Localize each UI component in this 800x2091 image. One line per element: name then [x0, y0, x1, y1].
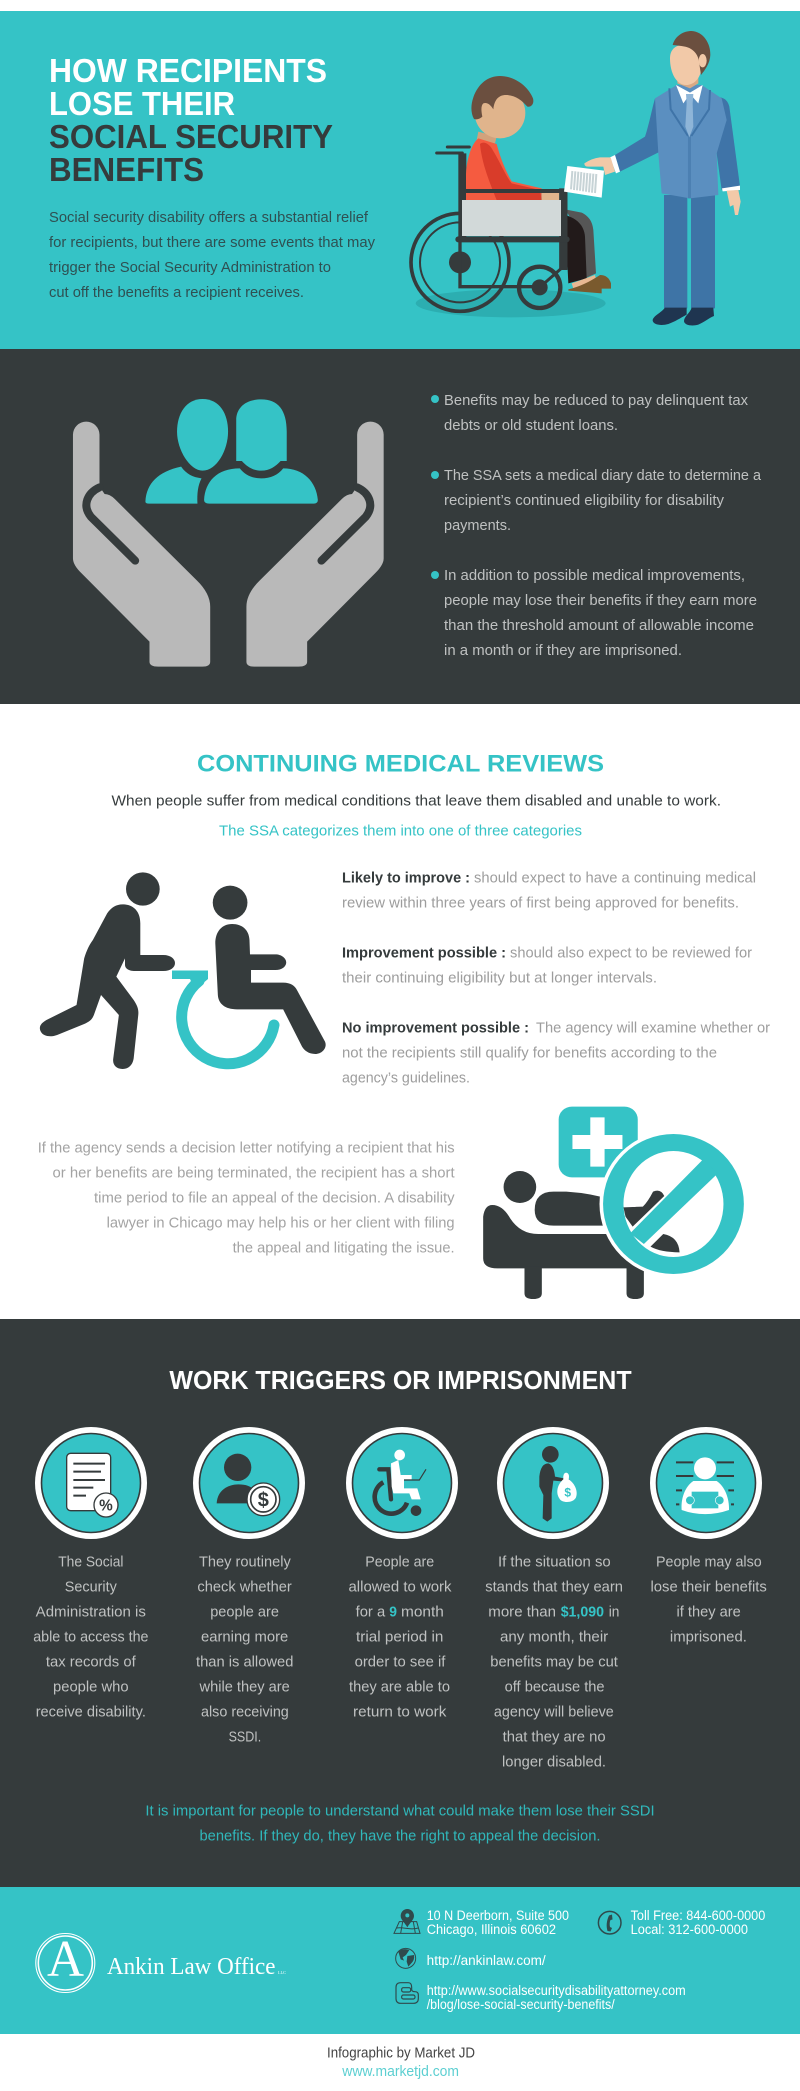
- column text: income limit: [485, 1554, 623, 1771]
- icon: person with money bag: $: [564, 1486, 571, 1500]
- column text: income limit: that they are no: [503, 1729, 606, 1746]
- bullet text: debts or old student loans.: [444, 417, 618, 434]
- bullet text: than the threshold amount of allowable income: [444, 617, 754, 634]
- column text: trial period: order to see if: [355, 1654, 446, 1671]
- category line: The SSA categorizes them into one of three categories: [219, 822, 582, 840]
- column text: imprisonment: [650, 1554, 767, 1646]
- column text: tax records: [33, 1554, 149, 1721]
- category descriptions: should also expect to be reviewed for: [510, 944, 752, 962]
- icon: globe: [396, 1948, 416, 1968]
- closing statement: It is important for people to understand what could make them lose their SSDI: [145, 1803, 655, 1820]
- appeal paragraph: or her benefits are being terminated, the recipient has a short: [52, 1164, 455, 1181]
- column text: tax records: receive disability.: [36, 1704, 146, 1721]
- standing man head: [677, 77, 698, 88]
- credit line: www.marketjd.com: [341, 2063, 459, 2080]
- appeal paragraph: If the agency sends a decision letter notifying a recipient that his: [38, 1139, 455, 1156]
- column text: tax records: tax records of: [46, 1654, 137, 1671]
- icon: document with percent: [38, 1430, 144, 1536]
- heading: CONTINUING MEDICAL REVIEWS: [197, 750, 604, 778]
- column text: routine checks: earning more: [201, 1629, 288, 1646]
- subheading: When people suffer from medical conditions that leave them disabled and unable to work.: [112, 792, 721, 810]
- website link: http://ankinlaw.com/: [427, 1953, 546, 1968]
- panel: header: [0, 11, 800, 349]
- column text: routine checks: people are: [210, 1604, 279, 1621]
- column text: tax records: people who: [53, 1679, 129, 1696]
- logo: Ankin Law Office: [36, 1931, 286, 1992]
- icon: person pushing wheelchair: [40, 872, 326, 1069]
- column text: imprisonment: imprisoned.: [670, 1629, 747, 1646]
- column text: trial period: they are able to: [349, 1679, 450, 1696]
- column text: income limit: benefits may be cut: [490, 1654, 619, 1671]
- category descriptions: [342, 870, 770, 1086]
- category descriptions: not the recipients still qualify for benefits according to the: [342, 1044, 717, 1062]
- column text: income limit: longer disabled.: [502, 1754, 606, 1771]
- icon: patient in bed with prohibition sign: [483, 1107, 747, 1299]
- icon: map pin: [394, 1909, 420, 1933]
- logo: Ankin Law Office: Ankin Law Office: [107, 1954, 276, 1980]
- column text: tax records: Administration is: [36, 1604, 146, 1621]
- column text: income limit: $1,090: [561, 1604, 604, 1621]
- paper: [564, 166, 604, 198]
- panel: work triggers or imprisonment: [0, 1319, 800, 1887]
- icon: blog: [396, 1983, 418, 2003]
- category descriptions: agency’s guidelines.: [342, 1070, 470, 1086]
- bullet text: The SSA sets a medical diary date to determine a: [444, 467, 762, 484]
- title: [49, 52, 333, 188]
- column text: trial period: [348, 1554, 452, 1721]
- column text: income limit: more than: [488, 1604, 556, 1621]
- column text: income limit: in: [609, 1604, 619, 1621]
- column text: routine checks: than is allowed: [196, 1654, 293, 1671]
- column text: income limit: If the situation so: [498, 1554, 611, 1571]
- heading: WORK TRIGGERS OR IMPRISONMENT: [169, 1367, 632, 1395]
- column text: imprisonment: if they are: [676, 1604, 741, 1621]
- icon: person with money bag: [500, 1430, 606, 1536]
- panel: footer contact: [0, 1887, 800, 2034]
- column text: tax records: able to access the: [33, 1629, 149, 1646]
- column text: trial period: allowed to work: [348, 1579, 452, 1596]
- bullet text: payments.: [444, 517, 511, 534]
- bullet text: In addition to possible medical improvements,: [444, 567, 745, 584]
- phone text: Local: 312-600-0000: [631, 1922, 748, 1937]
- title: LOSE THEIR: [49, 85, 235, 122]
- panel: dark intro with hands: [0, 349, 800, 704]
- sleeves: [615, 98, 667, 172]
- blog link: http://www.socialsecuritydisabilityattorney.com: [427, 1983, 686, 1998]
- blog link: /blog/lose-social-security-benefits/: [427, 1997, 615, 2012]
- category descriptions: Improvement possible :: [342, 944, 506, 962]
- column text: tax records: Security: [65, 1579, 117, 1596]
- icon: phone: [598, 1911, 621, 1934]
- intro text: cut off the benefits a recipient receives.: [49, 284, 304, 301]
- category descriptions: review within three years of first being approved for benefits.: [342, 894, 739, 912]
- category descriptions: The agency will examine whether or: [536, 1020, 770, 1036]
- category descriptions: should expect to have a continuing medical: [474, 870, 756, 886]
- closing statement: [145, 1803, 655, 1845]
- icon: person with dollar: $: [258, 1489, 269, 1511]
- address text: 10 N Deerborn, Suite 500: [427, 1908, 569, 1923]
- column text: trial period: trial period in: [356, 1629, 443, 1646]
- icon: wheelchair user with laptop: [349, 1430, 455, 1536]
- category descriptions: Likely to improve :: [342, 870, 470, 886]
- bullets: [431, 395, 439, 579]
- column text: routine checks: [196, 1554, 293, 1746]
- column text: routine checks: also receiving: [201, 1704, 289, 1721]
- column text: imprisonment: lose their benefits: [650, 1579, 767, 1596]
- appeal paragraph: [38, 1139, 455, 1256]
- big wheel: [411, 213, 509, 311]
- column text: trial period: return to work: [353, 1704, 447, 1721]
- people: [145, 399, 318, 504]
- icon: prisoner with lineup lines: [653, 1430, 759, 1536]
- intro text: [49, 209, 375, 301]
- left hand: [73, 422, 210, 667]
- column text: tax records: The Social: [58, 1554, 124, 1571]
- icon: hands holding people: [73, 399, 384, 667]
- appeal paragraph: time period to file an appeal of the decision. A disability: [94, 1189, 455, 1206]
- appeal paragraph: lawyer in Chicago may help his or her client with filing: [107, 1214, 455, 1231]
- small wheel: [519, 267, 560, 308]
- column text: income limit: agency will believe: [494, 1704, 614, 1721]
- illustration: man in wheelchair receiving a document: [411, 31, 741, 326]
- icon: document with percent: %: [99, 1498, 113, 1515]
- credit line: Infographic by Market JD: [327, 2045, 475, 2062]
- category descriptions: their continuing eligibility but at longer intervals.: [342, 970, 657, 986]
- credit line: [327, 2045, 475, 2080]
- intro text: for recipients, but there are some events that may: [49, 234, 375, 251]
- category descriptions: No improvement possible :: [342, 1020, 529, 1036]
- address text: Chicago, Illinois 60602: [427, 1922, 556, 1937]
- column text: routine checks: They routinely: [199, 1554, 291, 1571]
- trousers and shoe: [565, 209, 596, 278]
- logo: Ankin Law Office: LLC: [278, 1970, 286, 1975]
- address text: [427, 1908, 569, 1937]
- bullet text: people may lose their benefits if they earn more: [444, 592, 757, 609]
- title: HOW RECIPIENTS: [49, 52, 327, 89]
- intro text: trigger the Social Security Administration to: [49, 259, 331, 276]
- title: SOCIAL SECURITY: [49, 118, 333, 155]
- title: BENEFITS: [49, 151, 204, 188]
- seated man: [477, 132, 497, 143]
- bullet text: recipient’s continued eligibility for disability: [444, 492, 724, 509]
- logo: Ankin Law Office: A: [47, 1931, 84, 1988]
- column text: routine checks: check whether: [197, 1579, 292, 1596]
- blog link: [427, 1983, 686, 2012]
- column text: trial period: month: [401, 1604, 444, 1621]
- column text: trial period: 9: [389, 1604, 397, 1621]
- closing statement: benefits. If they do, they have the right to appeal the decision.: [200, 1828, 600, 1845]
- panel: continuing medical reviews: [38, 750, 770, 1299]
- appeal paragraph: the appeal and litigating the issue.: [233, 1239, 455, 1256]
- phone text: [631, 1908, 765, 1937]
- column text: routine checks: while they are: [199, 1679, 290, 1696]
- bullet text: in a month or if they are imprisoned.: [444, 642, 682, 659]
- icon: person with dollar: [196, 1430, 302, 1536]
- chair frame: [465, 185, 563, 197]
- column text: income limit: any month, their: [500, 1629, 608, 1646]
- column text: routine checks: SSDI.: [229, 1729, 261, 1746]
- bullet text: Benefits may be reduced to pay delinquent tax: [444, 392, 748, 409]
- intro text: Social security disability offers a substantial relief: [49, 209, 369, 226]
- column text: income limit: stands that they earn: [485, 1579, 623, 1596]
- column text: trial period: for a: [356, 1604, 386, 1621]
- bullet text: [444, 392, 762, 659]
- column text: income limit: off because the: [505, 1679, 605, 1696]
- column text: trial period: People are: [365, 1554, 434, 1571]
- jacket: [655, 85, 727, 198]
- column text: imprisonment: People may also: [656, 1554, 762, 1571]
- standing man legs: [664, 195, 715, 308]
- phone text: Toll Free: 844-600-0000: [631, 1908, 765, 1923]
- right hand: [246, 422, 384, 667]
